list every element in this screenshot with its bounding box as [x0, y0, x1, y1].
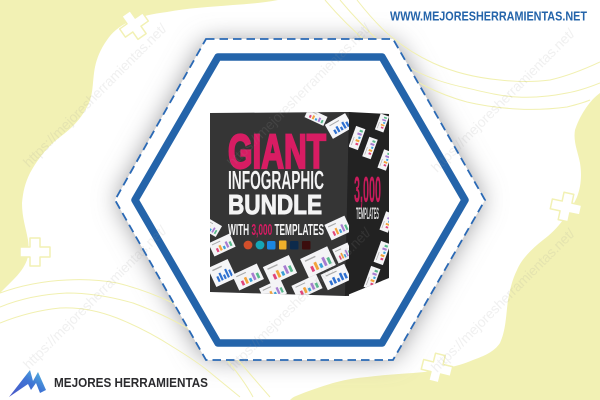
front template thumbnails — [210, 112, 349, 295]
plus icon: top left — [115, 6, 153, 44]
watermarks: https://mejoresherramientas.net/ — [428, 225, 578, 375]
plus icon: left — [20, 238, 50, 266]
box title: INFOGRAPHIC: INFOGRAPHIC — [228, 165, 324, 195]
logo: mountain mark — [9, 370, 46, 397]
infographic canvas: TEMPLATES — [356, 204, 379, 223]
box title: BUNDLE: BUNDLE — [228, 189, 322, 220]
box subtitle: WITH 3,000 TEMPLATES — [228, 222, 324, 239]
hexagon drop shadow — [118, 43, 482, 357]
box title: GIANT: GIANT — [228, 126, 326, 179]
watermarks: https://mejoresherramientas.net/ — [20, 222, 170, 372]
infographic canvas: 3,000 — [354, 169, 381, 210]
watermarks: https://mejoresherramientas.net/ — [224, 20, 374, 170]
software icons — [244, 240, 310, 250]
yellow blob: top left — [0, 0, 278, 293]
logo: brand name: MEJORES HERRAMIENTAS — [54, 376, 208, 390]
box side face — [345, 112, 389, 296]
outer hexagon: dashed — [115, 39, 485, 360]
product box — [210, 112, 389, 296]
watermarks: https://mejoresherramientas.net/ — [20, 20, 170, 170]
watermarks: https://mejoresherramientas.net/ — [224, 224, 374, 374]
plus icon: bottom — [419, 351, 455, 385]
plus icon: right — [548, 190, 584, 224]
yellow blob: bottom right — [290, 93, 600, 400]
inner hexagon: solid blue — [135, 57, 465, 343]
side template thumbnails — [349, 114, 389, 288]
watermarks: https://mejoresherramientas.net/ — [428, 25, 578, 175]
box front face — [210, 112, 349, 296]
